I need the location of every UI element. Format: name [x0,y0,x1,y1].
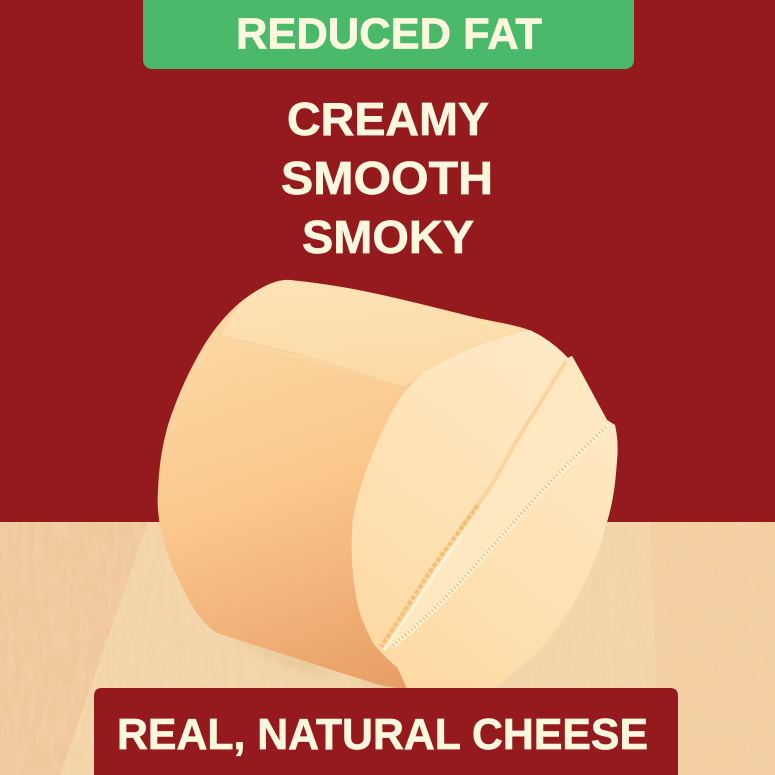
banner label: REDUCED FAT [236,10,542,58]
cheese shadow [210,630,420,690]
cheese slit [381,356,608,650]
second cut [393,425,608,647]
flavor descriptors: CREAMY [287,93,489,145]
cheese block [158,280,618,690]
second cut teeth [393,427,606,646]
cheese top highlight [220,280,530,387]
red background [0,0,775,523]
green banner [143,0,634,69]
wooden table surface [0,522,775,775]
cheese cut face [352,330,618,689]
flavor descriptors: SMOOTH [281,152,493,204]
first cut highlight [384,535,462,650]
red caption panel [94,688,678,775]
first cut, pale upper part [460,361,566,530]
cheese rind crease [220,336,403,387]
wedge between cuts [385,356,607,650]
caption label: REAL, NATURAL CHEESE [117,710,648,759]
cheese body [158,280,618,689]
flavor descriptors: SMOKY [302,211,474,263]
flavor descriptors [281,93,493,263]
first cut, orange lower part [381,505,478,647]
